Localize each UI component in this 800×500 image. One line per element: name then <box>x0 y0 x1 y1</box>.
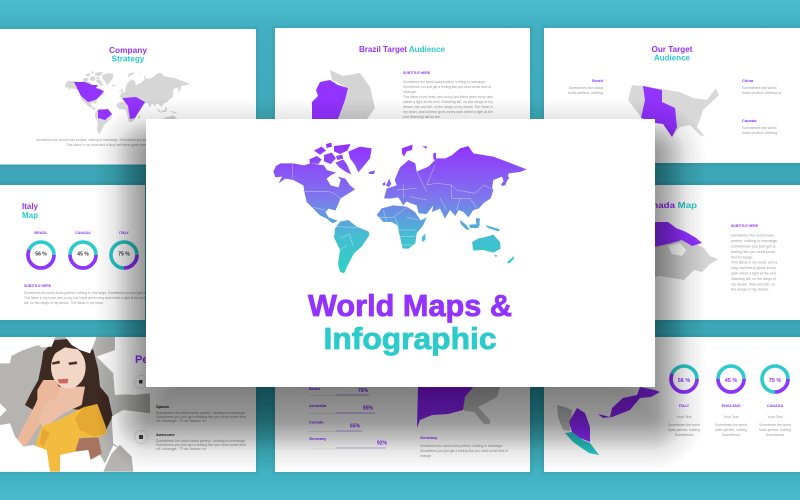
donut: brazil <box>28 231 54 268</box>
heading fragment: Pe <box>135 354 148 366</box>
label: brazil: looks perfect, nothing <box>568 91 603 95</box>
bar: germany: 92% <box>377 440 388 446</box>
bar: australia <box>309 403 375 414</box>
donut: italy <box>668 366 700 437</box>
subtitle text block <box>24 284 146 305</box>
label: china <box>742 78 781 95</box>
panel: germany bars and map <box>275 337 530 472</box>
donut: italy: ITALY <box>119 231 129 235</box>
panel: canada map <box>640 185 800 320</box>
main title <box>308 288 512 356</box>
donut: england: ENGLAND <box>722 404 741 408</box>
subtitle text block: dark street a light at the end. <box>731 272 777 276</box>
label: china: China <box>742 78 754 83</box>
center card shadow <box>96 100 705 470</box>
label: canada: looks perfect, nothing <box>742 131 777 135</box>
subtitle text block: Standing tall, on the wings of <box>731 277 777 281</box>
panel: portrait <box>0 337 256 472</box>
panel: italy map <box>0 185 146 320</box>
bar: brazil: 76% <box>358 388 369 394</box>
germany text block: change. <box>420 454 432 458</box>
bar: canada: 65% <box>350 424 361 430</box>
heading: company strategy <box>109 46 148 64</box>
donut: canada: CANADA <box>767 404 783 408</box>
main title: World Maps & <box>308 288 512 323</box>
us southeast map <box>417 387 500 428</box>
subtitle text block: This flame in my heart, and a long lost friend gives every dark street a light at the end <box>24 296 145 300</box>
bar: canada: Canada <box>309 420 324 424</box>
donut: england: Sometimes the world <box>715 423 747 427</box>
subtitle text block: my dream. Rise and fall, on <box>731 282 775 286</box>
item: splash: of change. This flame in <box>156 419 206 423</box>
donut: canada <box>759 366 791 437</box>
subtitle text block <box>731 224 778 292</box>
subtitle text block: long lost friend gives every <box>731 266 776 270</box>
subtitle text block: perfect, nothing to rearrange. <box>731 239 778 243</box>
regional map <box>312 70 375 119</box>
world map highlighted <box>65 71 190 134</box>
bar: brazil <box>309 386 369 396</box>
heading: Map <box>22 211 38 220</box>
heading <box>652 45 693 62</box>
donut: canada: 75 % <box>769 378 781 384</box>
item: splash: Sometimes the world looks perfect, nothing to rearrange. <box>156 411 246 415</box>
bar list <box>309 386 388 449</box>
heading: company strategy: Company <box>109 46 148 55</box>
usa map <box>628 85 719 137</box>
heading: Brazil Target Audience <box>359 45 446 54</box>
heading: Canada Map <box>640 201 697 210</box>
subtitle text block: street a light at the end. Standing tall, on the wings of my <box>403 100 493 104</box>
heading: Italy <box>22 202 39 211</box>
subtitle text block: feeling like you need some <box>731 250 775 254</box>
subtitle text block: Sometimes you just get a feeling like you need some kind of <box>403 85 492 89</box>
bar: germany: Germany <box>309 436 327 441</box>
germany text block: Sometimes you just get a feeling like you need some kind of <box>420 449 509 453</box>
panel: company strategy <box>0 29 256 164</box>
panel: malaysia and stats <box>544 337 800 472</box>
center panel <box>146 119 655 387</box>
donut: italy: 75 % <box>118 252 130 258</box>
description text <box>36 138 148 147</box>
label: canada: Canada <box>742 118 757 123</box>
panel: brazil target audience <box>275 28 530 163</box>
donut: england: Your Text <box>723 415 739 419</box>
icon: top circle <box>134 376 148 388</box>
donut: england: Sometimes <box>722 433 740 437</box>
subtitle text block: change. <box>403 90 417 94</box>
item: splash: Sometimes you just get a feeling like you need some kind <box>156 415 246 419</box>
bar: brazil: Brazil <box>309 386 320 391</box>
donut: italy <box>111 231 137 268</box>
subtitle text block: Sometimes the world looks perfect, nothing to rearrange. Sometimes you just get a <box>24 291 146 295</box>
donut: england: looks perfect, nothing <box>715 428 747 432</box>
donut: canada: CANADA <box>75 231 91 235</box>
heading: Audience <box>654 54 691 62</box>
bar: canada <box>309 420 362 432</box>
label: china: looks perfect, nothing to <box>742 91 781 95</box>
portrait illustration with paint splash <box>0 337 150 472</box>
heading <box>22 202 39 220</box>
description text: Sometimes the world looks perfect, nothing to rearrange. Sometimes you just <box>36 138 148 142</box>
germany text block: Sometimes the world looks perfect, nothing to rearrange. <box>420 444 503 448</box>
bar: germany <box>309 436 388 449</box>
donut: italy: Your Text <box>676 415 692 419</box>
item: awesome <box>156 432 246 451</box>
donut: italy: Sometimes the world <box>668 423 700 427</box>
subtitle text block: Sometimes you just get a <box>731 244 776 248</box>
item: awesome: Awesome <box>156 432 175 437</box>
donut: italy: 56 % <box>678 378 690 384</box>
label: brazil: Brazil <box>592 78 603 83</box>
germany text block <box>420 435 509 458</box>
donut: italy: looks perfect, nothing <box>668 428 700 432</box>
subtitle text block: Sometimes the world looks perfect, nothing to rearrange. <box>403 80 486 84</box>
subtitle text block: SUBTITLE HERE <box>731 224 759 228</box>
canada map <box>650 222 718 280</box>
subtitle text block: the wings of my dream... <box>731 288 771 292</box>
bar: australia: 85% <box>363 406 374 412</box>
subtitle text block: my heart, and a friend goes every dark street a light at the <box>403 110 493 114</box>
label: brazil: Sometimes the world <box>569 86 603 90</box>
donut: italy: Sometimes <box>675 433 693 437</box>
gradient world map <box>273 143 527 273</box>
icon: bottom circle <box>134 430 148 444</box>
donut: canada: Your Text <box>767 415 783 419</box>
subtitle text block <box>403 71 493 119</box>
donut: brazil: BRAZIL <box>34 231 48 235</box>
description text: This flame in my heart and a long lost friend gives every <box>66 143 148 147</box>
main title: Infographic <box>324 321 496 356</box>
subtitle text block: tall, on the wings of my dream. The flame in my heart <box>24 301 103 305</box>
donut: italy: ITALY <box>679 404 690 408</box>
donut: brazil: 56 % <box>35 252 47 258</box>
donut: canada: looks perfect, nothing <box>759 428 791 432</box>
malaysia map <box>557 387 660 455</box>
donut: canada <box>70 231 96 268</box>
donut: england: 45 % <box>725 378 737 384</box>
label: canada: Sometimes the world <box>742 126 776 130</box>
heading: company strategy: Strategy <box>112 54 145 64</box>
subtitle text block: Sometimes the world looks <box>731 234 774 238</box>
heading: Our Target <box>652 45 693 54</box>
subtitle text block: SUBTITLE HERE <box>24 284 52 288</box>
donut: canada: Sometimes <box>766 433 784 437</box>
subtitle text block: This flame in my heart, and a long lost friend gives every dark <box>403 95 493 99</box>
subtitle text block: This flame in my heart, and a <box>731 260 778 264</box>
donut: england <box>715 366 747 437</box>
label: brazil <box>568 78 603 95</box>
donut: canada: Sometimes the world <box>759 423 791 427</box>
subtitle text block: SUBTITLE HERE <box>403 71 430 75</box>
item: splash: Splash <box>156 404 170 409</box>
subtitle text block: kind of change. <box>731 256 753 260</box>
bar: australia: Australia <box>309 403 327 408</box>
label: canada <box>742 118 777 135</box>
item: splash <box>156 404 246 423</box>
germany text block: Germany <box>420 435 438 440</box>
item: awesome: Sometimes you just get a feeling like you need some kind <box>156 443 246 447</box>
subtitle text block: end Standing tall on the <box>403 115 440 119</box>
item: awesome: Sometimes the world looks perfect, nothing to rearrange. <box>156 439 246 443</box>
panel: our target audience <box>544 28 800 163</box>
item: awesome: of change. This flame in <box>156 447 206 451</box>
donut: canada: 45 % <box>77 252 89 258</box>
subtitle text block: dream, rise and fall, on the wings of my dream. The flame in <box>403 105 493 109</box>
label: china: Sometimes the world <box>742 86 776 90</box>
